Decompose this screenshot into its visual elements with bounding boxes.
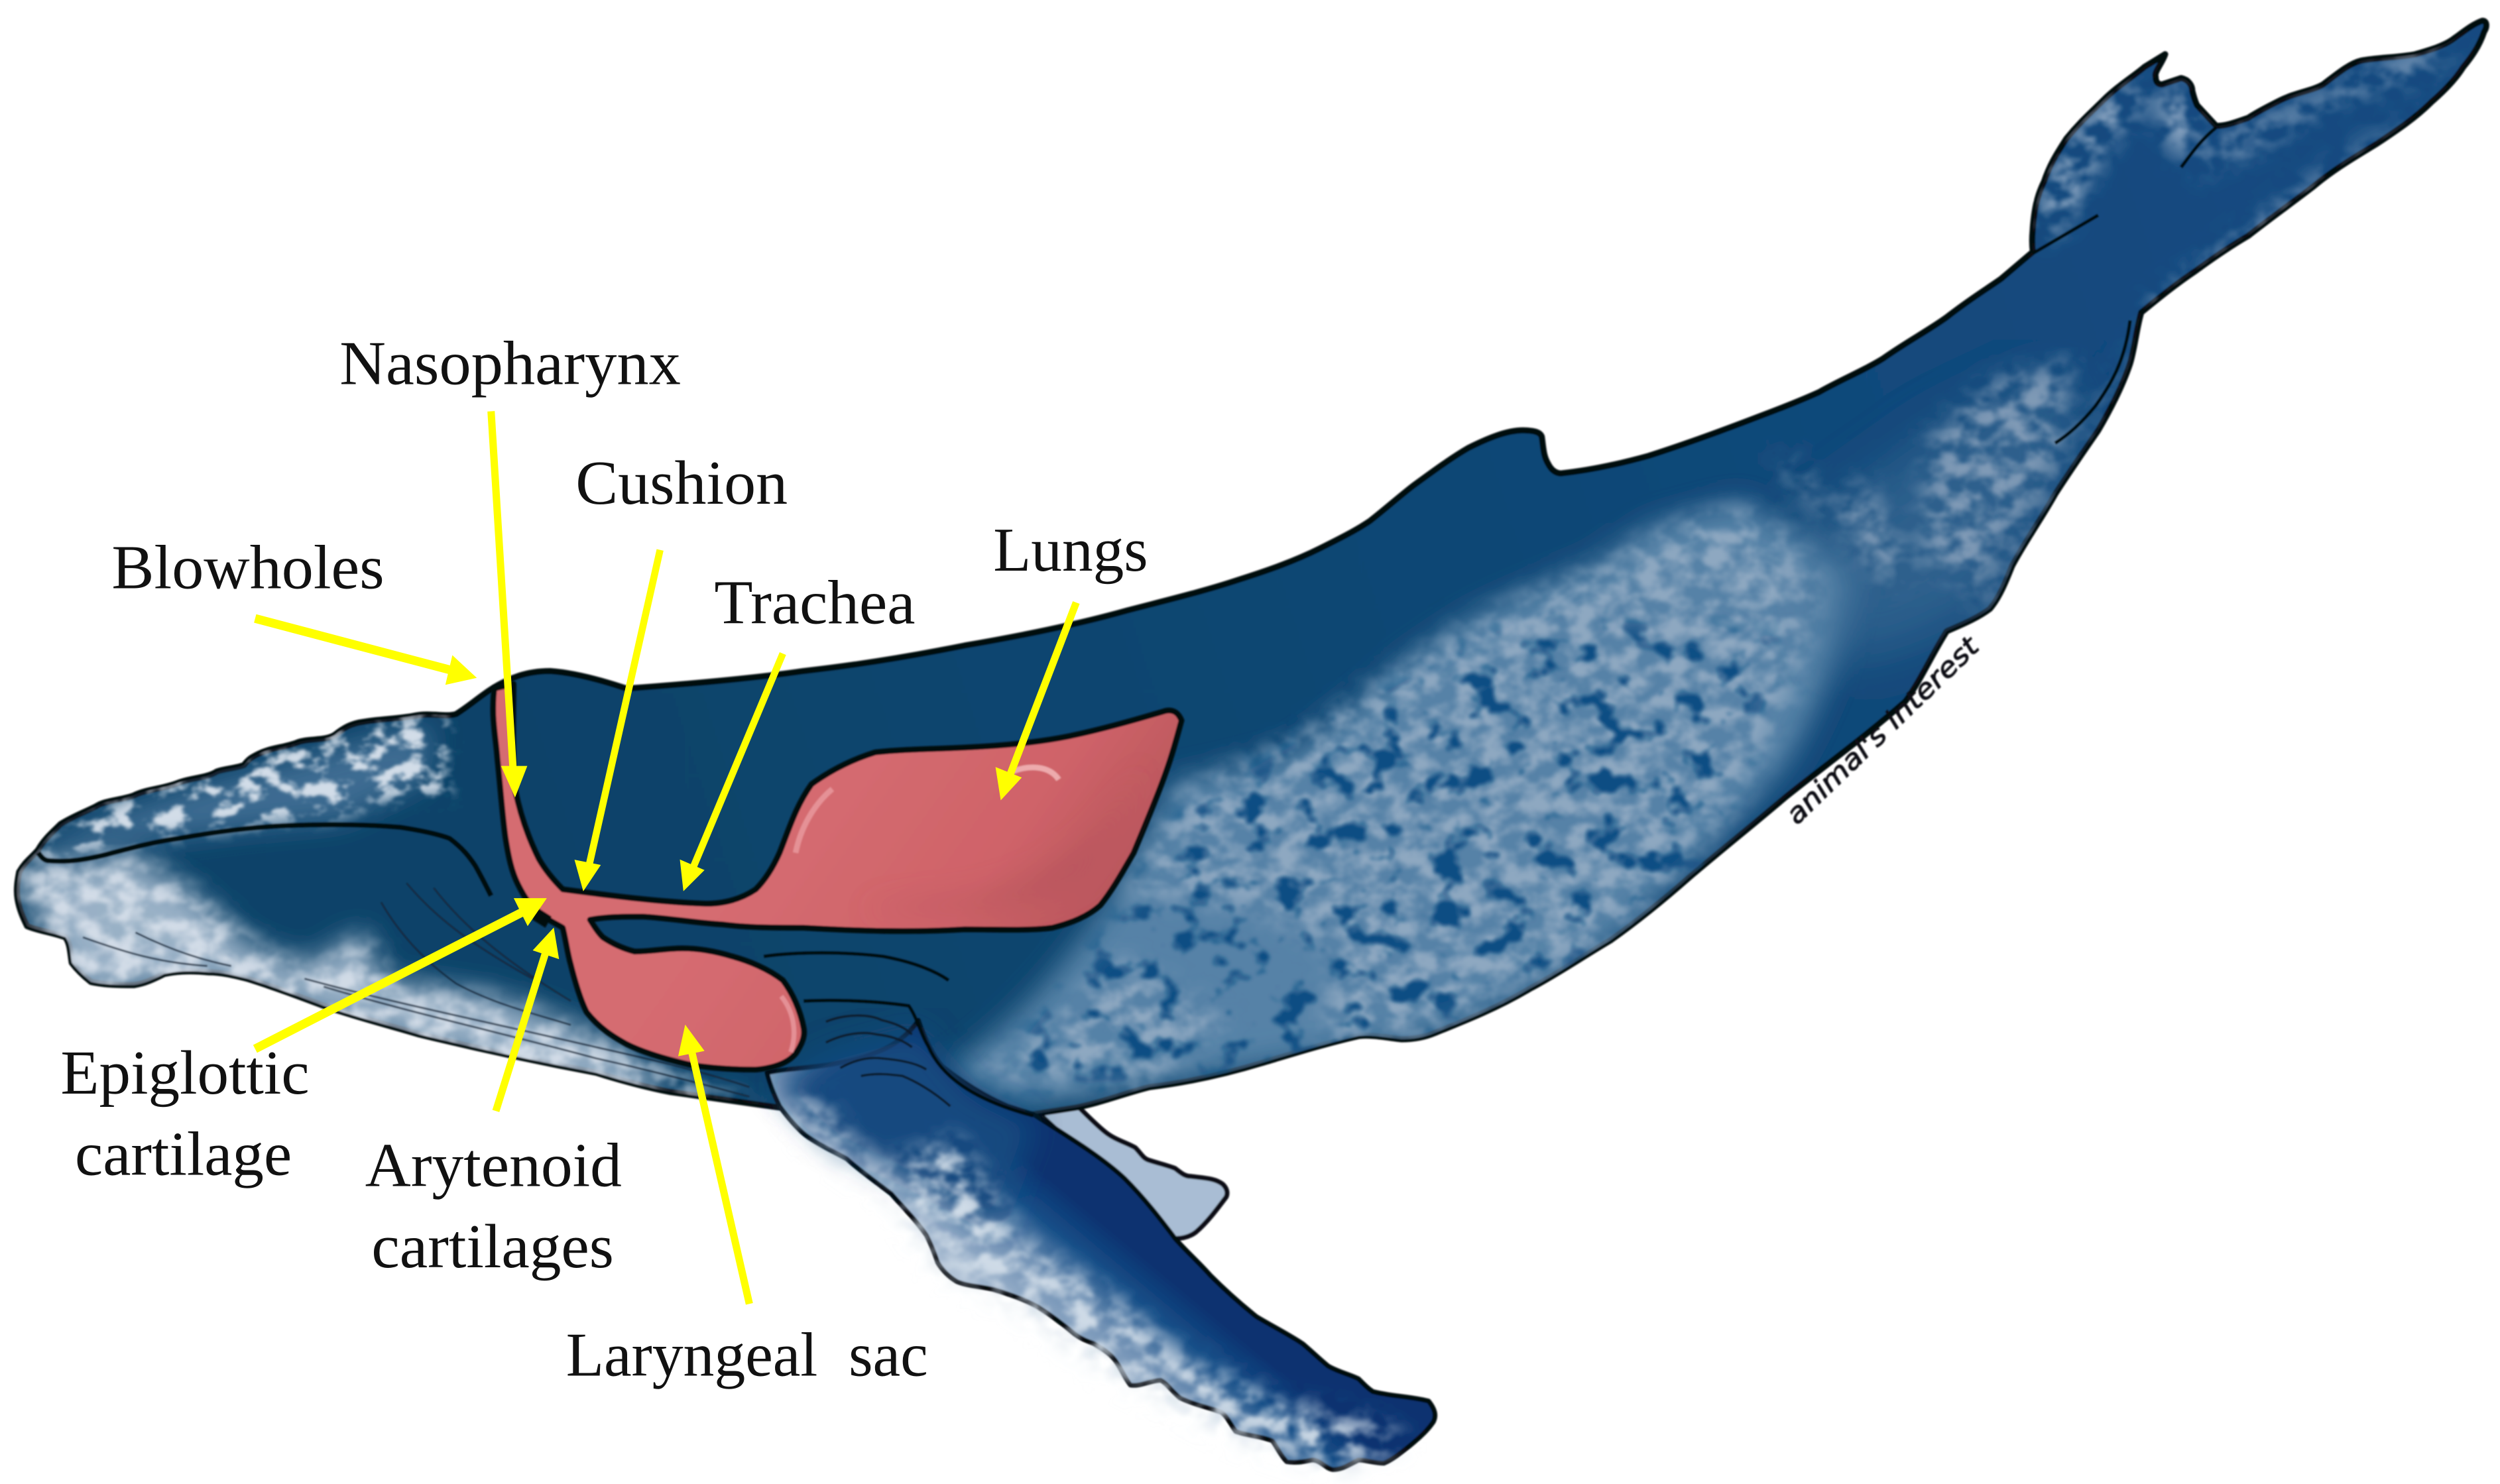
arrow: arytenoid cartilages: [496, 929, 558, 1111]
flipper root shading: [775, 1028, 1036, 1227]
upper jaw pale wash: [38, 724, 434, 858]
arrow: blowholes: [255, 618, 475, 684]
laryngeal sac highlight: [781, 996, 794, 1052]
flipper grooves: [826, 1015, 950, 1106]
airway organs: [493, 684, 1181, 1070]
label: cartilage: cartilage: [75, 1119, 292, 1188]
front flipper: [767, 1020, 1435, 1469]
watermark: animal's interest: animal's interest: [1779, 630, 1986, 830]
label: Arytenoid: Arytenoid: [365, 1131, 622, 1200]
lungs, trachea and nasopharynx: [493, 684, 1181, 1070]
label: Cushion: Cushion: [575, 449, 788, 518]
lower peduncle edge: [1964, 319, 2145, 614]
flank mid tone: [933, 502, 1858, 1108]
whale body: [17, 21, 2486, 1115]
label: Nasopharynx: Nasopharynx: [339, 329, 681, 398]
label: Blowholes: Blowholes: [111, 533, 385, 602]
label: Lungs: Lungs: [993, 516, 1148, 585]
lower jaw pale wash: [13, 858, 670, 1100]
label: Trachea: Trachea: [714, 568, 915, 637]
label: Laryngeal sac: Laryngeal sac: [566, 1320, 928, 1389]
lung highlight left: [796, 789, 832, 853]
arrow: lungs: [996, 602, 1076, 799]
tail fluke highlights: [2041, 38, 2468, 322]
lung highlight upper: [1012, 768, 1059, 779]
arrow: cushion: [575, 550, 660, 889]
arrow: nasopharynx: [491, 411, 526, 795]
tail fluke creases: [2033, 127, 2216, 443]
arrow: trachea: [681, 654, 783, 889]
flipper mottling: [784, 1100, 1403, 1469]
label: Epiglottic: Epiglottic: [60, 1039, 310, 1108]
skin mottling: [13, 38, 2468, 1115]
mouth line: [38, 825, 491, 896]
larynx dark junction: [532, 905, 552, 928]
arrow: laryngeal sac: [680, 1027, 749, 1304]
dark blue flank blotches: [988, 614, 1786, 1084]
yellow arrows: [255, 411, 1076, 1304]
arrow: epiglottic cartilage: [255, 899, 546, 1049]
pectoral crease lines: [764, 953, 1033, 1115]
throat grooves: [83, 883, 749, 1097]
labels: [60, 329, 1148, 1389]
rear body streaks: [1773, 359, 2072, 590]
upper jaw patches: [23, 709, 449, 869]
light flank speckle: [973, 510, 1826, 1084]
label: cartilages: cartilages: [371, 1212, 614, 1281]
lung shading: [861, 741, 1151, 911]
rear body lighter wash: [1802, 370, 2080, 669]
lower jaw speckle: [13, 858, 765, 1115]
rear flipper: [1036, 1108, 1227, 1239]
